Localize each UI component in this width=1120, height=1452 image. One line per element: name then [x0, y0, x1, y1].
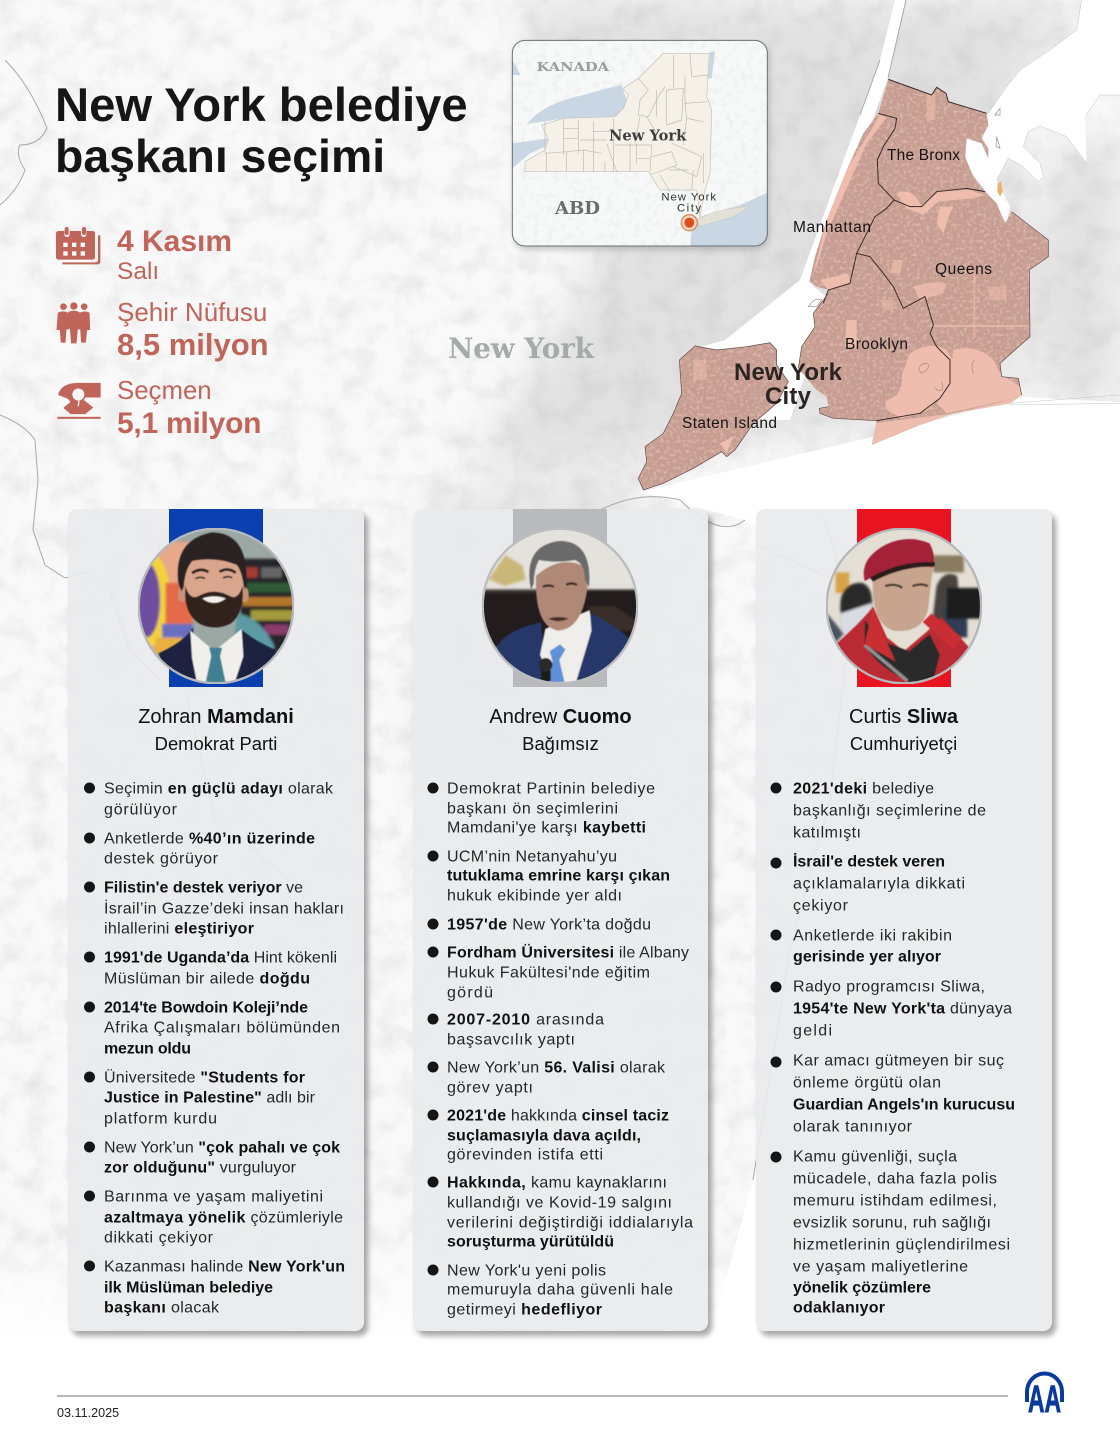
map labels: boroughs: The Bronx [887, 147, 960, 164]
bullet 6: yönelik çözümlere [793, 1280, 931, 1296]
photo: Andrew Cuomo [482, 530, 638, 682]
bullet 3: gerisinde yer alıyor [793, 948, 941, 966]
bullet 9: başkanı olacak [104, 1300, 220, 1316]
bullet 4: geldi [793, 1022, 832, 1040]
footer rule [57, 1395, 1008, 1397]
bullet 3: ihlallerini eleştiriyor [104, 920, 254, 938]
inset map: New York State: KANADA [537, 60, 610, 74]
bullet list [84, 780, 345, 1316]
bullet 1: Demokrat Partinin belediye [447, 780, 655, 798]
bullet 9: getirmeyi hedefliyor [447, 1302, 602, 1318]
bullet 1 [84, 780, 334, 818]
bullet 4: Fordham Üniversitesi ile Albany [447, 942, 689, 962]
bullet 9: Kazanması halinde New York'un [104, 1258, 345, 1276]
stat: city population: 8,5 milyon [117, 327, 269, 362]
panel: Zohran Mamdani [68, 509, 364, 1331]
map labels: boroughs: New York [734, 359, 843, 386]
bullet 5: başsavcılık yaptı [447, 1032, 575, 1048]
bullet 1: Mamdani'ye karşı kaybetti [447, 820, 646, 836]
icon: hand with ballot [57, 382, 101, 419]
party: Bağımsız [522, 733, 599, 754]
bullet 2 [770, 852, 965, 914]
bullet 1: başkanı ön seçimlerini [447, 800, 618, 818]
bullet 6: memuru istihdam edilmesi, [793, 1192, 997, 1210]
bullet 3: 1957'de New York’ta doğdu [447, 916, 651, 934]
bullet 3 [770, 928, 952, 966]
inset map: New York State: New York [609, 128, 687, 145]
bullet 8: Hakkında, kamu kaynaklarını [447, 1174, 667, 1192]
bullet 9 [428, 1262, 673, 1318]
bullet 9 [84, 1258, 345, 1316]
bullet 2: hukuk ekibinde yer aldı [447, 888, 622, 904]
bullet 5 [428, 1012, 604, 1048]
stat: city population [56, 297, 269, 362]
bullet 4: Hukuk Fakültesi'nde eğitim [447, 964, 650, 982]
map labels: boroughs: Brooklyn [845, 336, 908, 353]
bullet 7: zor olduğunu" vurguluyor [104, 1160, 297, 1176]
map labels: boroughs [682, 147, 992, 432]
bullet list [428, 780, 694, 1318]
bullet 6: Üniversitede "Students for [104, 1068, 305, 1086]
bullet 5: Afrika Çalışmaları bölümünden [104, 1020, 340, 1036]
bullet 4: gördü [447, 984, 493, 1002]
bullet 1 [770, 780, 986, 842]
panel: Andrew Cuomo [413, 509, 708, 1331]
bullet 7 [428, 1108, 669, 1164]
party colour bar: grey [513, 509, 607, 687]
bullet 8: kullandığı ve Kovid-19 salgını [447, 1194, 672, 1212]
bullet 8: verilerini değiştirdiği iddialarıyla [447, 1214, 693, 1232]
bullet 2: tutuklama emrine karşı çıkan [447, 868, 670, 884]
bullet 6 [84, 1068, 316, 1128]
bullet 8: azaltmaya yönelik çözümleriyle [104, 1210, 343, 1226]
party: Demokrat Parti [155, 733, 277, 754]
bullet 3: Anketlerde iki rakibin [793, 928, 952, 944]
stat: election date: Salı [117, 258, 159, 285]
bullet 4: Radyo programcısı Sliwa, [793, 978, 985, 996]
bullet 1: 2021'deki belediye [793, 780, 934, 798]
bullet 6: platform kurdu [104, 1110, 217, 1128]
bullet 6: odaklanıyor [793, 1300, 885, 1316]
bullet 4: Müslüman bir ailede doğdu [104, 970, 310, 988]
bullet 3: İsrail’in Gazze’deki insan hakları [104, 898, 344, 918]
bullet 7 [84, 1140, 340, 1176]
party colour bar: blue [169, 509, 263, 687]
bullet 1 [428, 780, 655, 836]
stat: voters: Seçmen [117, 377, 212, 405]
bullet 6: hizmetlerinin güçlendirilmesi [793, 1236, 1010, 1254]
bullet 6 [428, 1060, 666, 1096]
bullet 5: Guardian Angels'ın kurucusu [793, 1096, 1015, 1114]
map labels: boroughs: Staten Island [682, 415, 777, 432]
title: New York belediye [55, 79, 468, 132]
bullet 2: açıklamalarıyla dikkati [793, 876, 965, 892]
bullet 6: New York’un 56. Valisi olarak [447, 1060, 666, 1076]
bullet 5: olarak tanınıyor [793, 1118, 913, 1136]
stat: voters: 5,1 milyon [117, 407, 261, 440]
bullet 6 [770, 1148, 1010, 1316]
candidate name: Andrew Cuomo [489, 706, 632, 728]
inset map: New York State [511, 40, 772, 253]
bullet 2: Anketlerde %40’ın üzerinde [104, 830, 315, 848]
bullet 7: New York’un "çok pahalı ve çok [104, 1140, 340, 1156]
bullet 3: Filistin'e destek veriyor ve [104, 880, 303, 896]
bullet 6: ve yaşam maliyetlerine [793, 1258, 968, 1276]
bullet 4: 1991'de Uganda’da Hint kökenli [104, 950, 337, 966]
date: 03.11.2025 [57, 1406, 119, 1420]
bullet 4 [428, 942, 689, 1002]
bullet 8 [84, 1188, 343, 1246]
bullet 8 [428, 1174, 693, 1250]
panel: Curtis Sliwa [756, 509, 1052, 1331]
photo: Zohran Mamdani [138, 528, 294, 684]
party: Cumhuriyetçi [850, 733, 957, 754]
inset map: New York State: ABD [554, 198, 600, 219]
bullet 8: soruşturma yürütüldü [447, 1234, 614, 1250]
bullet 5: 2007-2010 arasında [447, 1012, 604, 1028]
bullet 5: 2014'te Bowdoin Koleji’nde [104, 1000, 308, 1016]
inset map: New York State: City [677, 203, 701, 215]
photo: Curtis Sliwa [826, 528, 982, 684]
bullet 3 [84, 880, 344, 938]
bullet 5 [770, 1052, 1015, 1136]
bullet 5: mezun oldu [104, 1040, 191, 1058]
map labels: boroughs: Manhattan [793, 219, 871, 236]
bullet 6: evsizlik sorunu, ruh sağlığı [793, 1214, 991, 1232]
bullet 4 [84, 950, 337, 988]
bullet 4: 1954'te New York'ta dünyaya [793, 1000, 1012, 1018]
bullet 1: katılmıştı [793, 824, 861, 842]
map labels: boroughs: Queens [935, 261, 992, 278]
title: başkanı seçimi [55, 130, 385, 182]
bullet 4 [770, 978, 1012, 1040]
icon: people [56, 302, 90, 344]
bullet list [770, 780, 1015, 1316]
map label: New York: New York [448, 332, 595, 365]
bullet 8: dikkati çekiyor [104, 1230, 214, 1246]
bullet 7: görevinden istifa etti [447, 1146, 603, 1164]
bullet 1: görülüyor [104, 802, 178, 818]
bullet 1: Seçimin en güçlü adayı olarak [104, 780, 334, 798]
bullet 6: Kamu güvenliği, suçla [793, 1148, 957, 1166]
bullet 6: Justice in Palestine" adlı bir [104, 1090, 316, 1106]
bullet 6: mücadele, daha fazla polis [793, 1170, 997, 1188]
stat: election date: 4 Kasım [117, 225, 232, 258]
bullet 8: Barınma ve yaşam maliyetini [104, 1188, 323, 1206]
title [55, 79, 468, 182]
bullet 2: destek görüyor [104, 850, 219, 868]
bullet 1: başkanlığı seçimlerine de [793, 802, 986, 820]
stat: voters [57, 377, 261, 440]
candidate name: Curtis Sliwa [849, 706, 958, 728]
bullet 9: ilk Müslüman belediye [104, 1280, 273, 1296]
bullet 2: İsrail'e destek veren [793, 852, 945, 870]
icon: calendar [56, 227, 100, 264]
bullet 5 [84, 1000, 340, 1058]
stat: election date [56, 225, 232, 285]
map: New York City boroughs [638, 78, 1049, 490]
inset map: New York State: New York [661, 191, 716, 203]
bullet 7: 2021'de hakkında cinsel taciz [447, 1108, 669, 1124]
bullet 9: memuruyla daha güvenli hale [447, 1282, 673, 1298]
bullet 9: New York'u yeni polis [447, 1262, 606, 1280]
bullet 5: Kar amacı gütmeyen bir suç [793, 1052, 1004, 1070]
bullet 2: çekiyor [793, 898, 849, 914]
bullet 2: UCM’nin Netanyahu’yu [447, 848, 617, 866]
candidate name: Zohran Mamdani [138, 706, 294, 728]
bullet 2 [84, 830, 315, 868]
party colour bar: red [857, 509, 951, 687]
bullet 2 [428, 848, 670, 904]
stat: city population: Şehir Nüfusu [117, 297, 267, 327]
bullet 7: suçlamasıyla dava açıldı, [447, 1128, 641, 1144]
map labels: boroughs: City [765, 383, 812, 410]
bullet 5: önleme örgütü olan [793, 1074, 941, 1092]
bullet 6: görev yaptı [447, 1080, 533, 1096]
